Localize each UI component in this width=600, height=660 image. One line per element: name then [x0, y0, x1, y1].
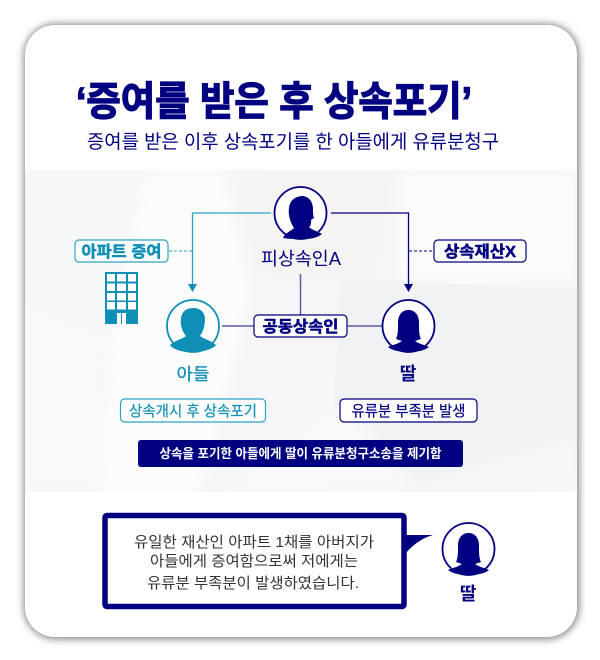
tag: renounced after inheritance: 상속개시 후 상속포기	[129, 403, 257, 420]
tag: joint heirs: 공동상속인	[262, 318, 338, 336]
tag: inherited property X: 상속재산X	[444, 243, 516, 261]
panel: blurred photo background	[25, 170, 577, 492]
label: daughter, bottom: 딸	[460, 584, 477, 604]
title: ‘증여를 받은 후 상속포기’	[76, 80, 472, 124]
bubble text: 유일한 재산인 아파트 1채를 아버지가	[134, 534, 374, 551]
tag: forced-share shortfall: 유류분 부족분 발생	[352, 403, 466, 420]
tag: apartment gift	[75, 240, 168, 262]
bubble text: 아들에게 증여함으로써 저에게는	[150, 553, 358, 570]
arrowhead: to son	[188, 284, 197, 292]
bubble text	[134, 534, 374, 592]
icon: daughter avatar	[382, 300, 434, 352]
icon: father avatar	[274, 187, 326, 239]
icon: son avatar	[167, 300, 219, 352]
tag: renounced after inheritance	[120, 399, 266, 422]
connector: joint heirs	[222, 274, 382, 326]
speech bubble	[105, 516, 433, 606]
dotted line: inherited property	[409, 250, 433, 252]
arrowhead: to daughter	[404, 284, 413, 292]
connector: father to son	[192, 213, 271, 286]
banner: lawsuit filed: 상속을 포기한 아들에게 딸이 유류분청구소송을 제기함	[160, 446, 442, 461]
label: daughter: 딸	[400, 364, 417, 384]
dotted line: apartment gift	[169, 250, 192, 252]
tag: joint heirs	[254, 315, 347, 337]
label: decedent A: 피상속인A	[261, 249, 341, 269]
banner: lawsuit filed	[138, 440, 463, 467]
icon: daughter avatar, bottom	[442, 523, 494, 575]
label: son: 아들	[176, 365, 210, 384]
tag: apartment gift: 아파트 증여	[82, 243, 162, 261]
tag: inherited property X	[434, 240, 526, 262]
connector: father to daughter	[331, 213, 408, 286]
bubble text: 유류분 부족분이 발생하였습니다.	[147, 575, 359, 592]
tag: forced-share shortfall	[340, 399, 477, 422]
icon: apartment building	[105, 272, 138, 324]
subtitle: 증여를 받은 이후 상속포기를 한 아들에게 유류분청구	[87, 131, 499, 153]
